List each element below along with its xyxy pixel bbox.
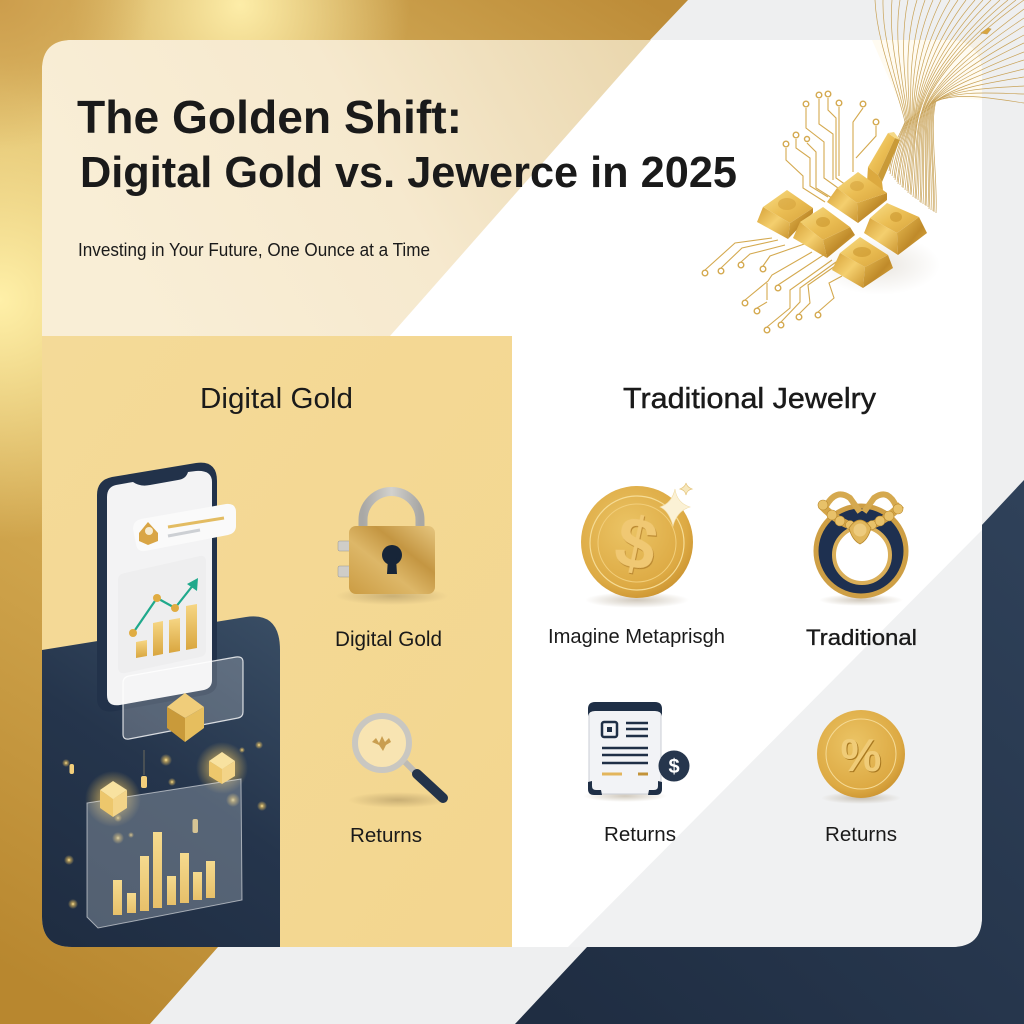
icon: glowing cube right xyxy=(209,752,235,784)
title xyxy=(77,91,737,197)
icon: magnifying glass xyxy=(348,716,448,808)
icon: large gold cube xyxy=(167,693,204,742)
bar A xyxy=(757,207,790,239)
bar D xyxy=(864,218,898,255)
icon: padlock xyxy=(336,492,448,605)
decorative wave of gold lines xyxy=(875,0,1024,213)
label: returns 3: Returns xyxy=(825,824,897,846)
title: Digital Gold vs. Jewerce in 2025 xyxy=(80,148,737,197)
label: returns 2: Returns xyxy=(604,824,676,846)
icon: ring with necklace xyxy=(816,494,906,606)
icon: percent coin: % xyxy=(841,729,881,781)
icon: glowing cube left xyxy=(100,781,127,817)
label: traditional: Traditional xyxy=(806,625,917,650)
label: digital gold: Digital Gold xyxy=(335,628,442,651)
subtitle: Investing in Your Future, One Ounce at a Time xyxy=(78,240,430,260)
capsules xyxy=(70,750,198,833)
bar C xyxy=(793,222,827,258)
bar E xyxy=(832,253,865,288)
navy base shape xyxy=(42,616,280,947)
bar B xyxy=(827,188,858,223)
icon: dollar coin xyxy=(581,483,693,608)
glowing sparkles xyxy=(62,741,267,909)
heading: traditional jewelry: Traditional Jewelry xyxy=(623,383,877,415)
icon: document with dollar badge: $ xyxy=(668,756,680,778)
glass plate xyxy=(123,657,243,739)
heading: digital gold: Digital Gold xyxy=(200,383,353,415)
profile pill xyxy=(133,504,236,551)
circuit traces xyxy=(705,98,876,327)
title: The Golden Shift: xyxy=(77,91,462,143)
illustration: gold bars with circuit traces xyxy=(702,91,940,333)
glass bar chart panel xyxy=(87,779,242,928)
icon: dollar coin: $ xyxy=(608,501,664,587)
phone illustration xyxy=(97,463,236,711)
panel: digital gold xyxy=(42,336,512,947)
label: returns 1: Returns xyxy=(350,825,422,847)
label: imagine metaprisgh: Imagine Metaprisgh xyxy=(548,625,725,648)
tilted bar xyxy=(868,133,895,175)
chart card xyxy=(118,556,206,673)
icon: percent coin xyxy=(817,710,905,804)
icon: document with dollar badge xyxy=(583,702,690,802)
